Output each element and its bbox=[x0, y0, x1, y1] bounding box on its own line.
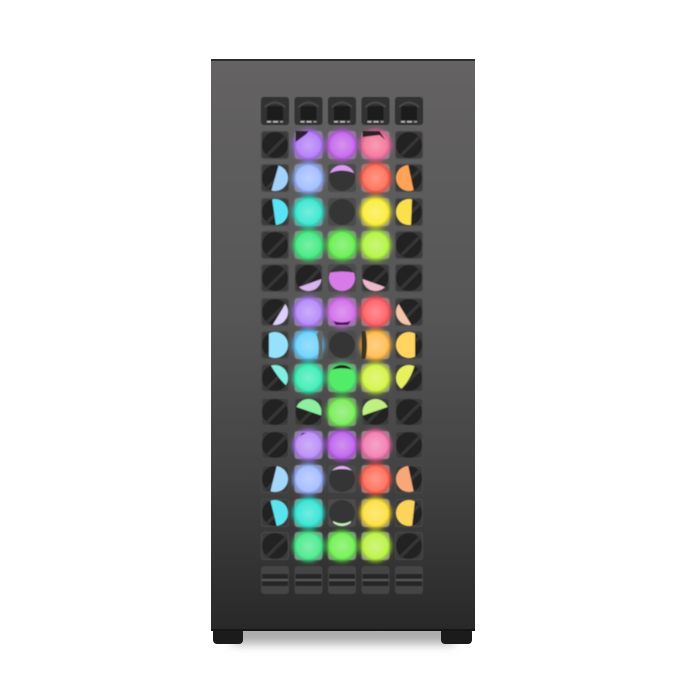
case body bbox=[211, 59, 475, 631]
floor shadow bbox=[232, 622, 454, 644]
front panel grid of RGB fans bbox=[261, 97, 423, 594]
row 11: purple to pink lights bbox=[261, 430, 423, 460]
row 4: cyan, teal and yellow lights bbox=[261, 196, 423, 228]
row 6: partially revealed lights bbox=[261, 264, 423, 292]
row 8: sky blue and amber lights bbox=[261, 330, 423, 360]
row 14: green lights bbox=[261, 530, 423, 562]
row 2: purple to pink lights bbox=[261, 130, 423, 160]
feet bbox=[213, 628, 472, 644]
infographic: PC case front view bbox=[211, 59, 475, 650]
row 5: green lights bbox=[261, 230, 423, 260]
row 12: blue, coral and orange lights bbox=[261, 464, 423, 494]
row 10: top slivers of green lights bbox=[261, 396, 423, 428]
row 13: cyan, teal and yellow lights bbox=[261, 498, 423, 528]
row 9: teal, green and lime lights bbox=[261, 362, 423, 394]
row 7: purple to red lights bbox=[261, 296, 423, 328]
row 15: bottom grille bbox=[261, 566, 423, 594]
row 3: blue, coral and orange lights bbox=[261, 162, 423, 194]
row 1: top grille bbox=[261, 97, 423, 125]
